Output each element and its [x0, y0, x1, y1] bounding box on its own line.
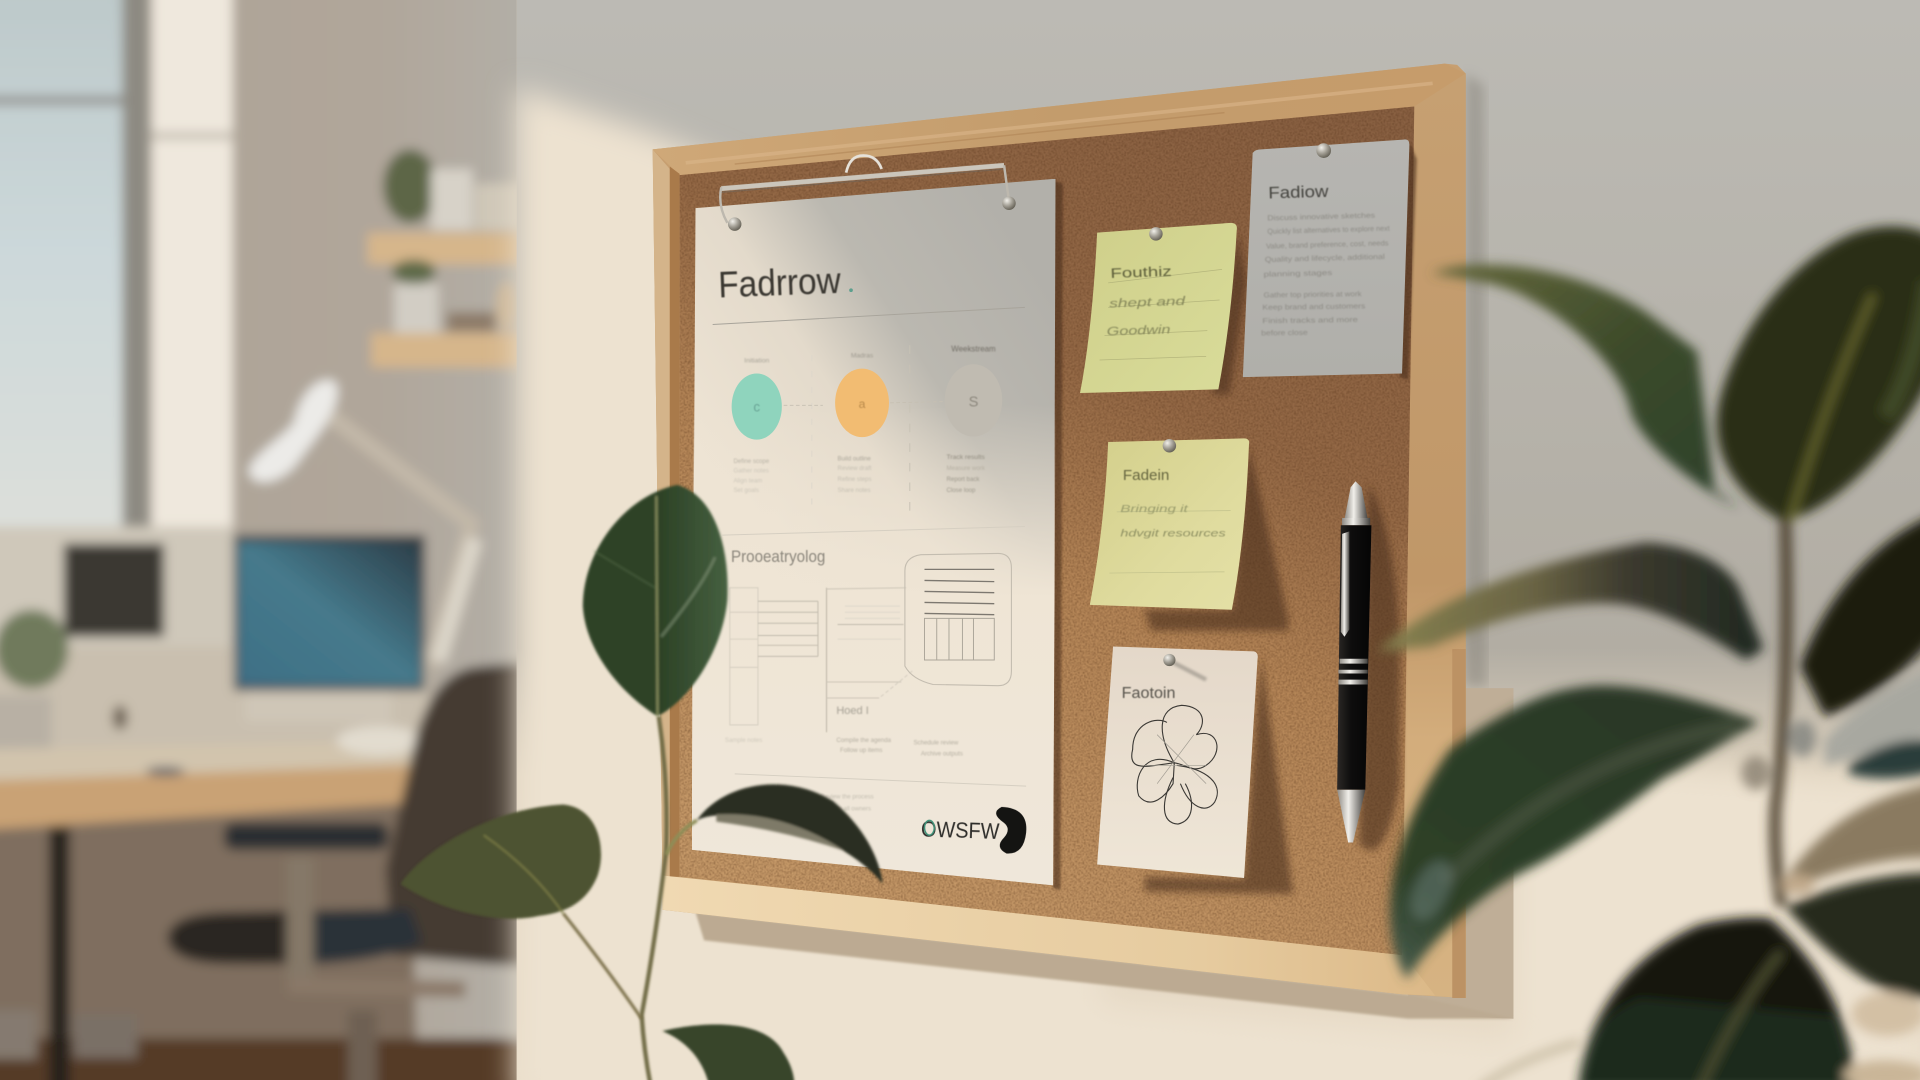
leaf: middle	[1378, 542, 1763, 660]
step circle: teal: Define scope	[733, 458, 770, 465]
note: yellow sticky top: Goodwin	[1107, 323, 1171, 339]
step circle: grey: Weekstream	[951, 344, 996, 353]
step circle: orange: Refine steps	[838, 476, 872, 483]
section heading: Prooeatryolog	[731, 547, 825, 566]
floating shelves	[367, 149, 530, 367]
card body text: Discuss innovative sketches	[1267, 211, 1375, 222]
board soft shadow	[1466, 73, 1487, 686]
step circle: teal: Gather notes	[733, 468, 769, 475]
leaf: upper right	[1717, 227, 1920, 520]
leaf: left	[400, 804, 601, 919]
step circle: grey	[945, 344, 1002, 494]
step circle: orange: a	[859, 397, 866, 411]
card body text: Quality and lifecycle, additional	[1265, 252, 1385, 264]
step circle: grey: Measure work	[947, 465, 986, 472]
shadows of pinned items	[1053, 142, 1417, 894]
desk plant	[0, 610, 127, 759]
card body text: Value, brand preference, cost, needs	[1266, 238, 1389, 251]
poster: Fadrrow: Confirm all owners	[820, 806, 871, 813]
step circle: teal	[732, 357, 782, 494]
note: yellow sticky top	[1080, 223, 1237, 393]
blurred office background	[0, 0, 551, 1080]
card body text: Gather top priorities at work	[1264, 289, 1362, 300]
step circle: grey: Track results	[947, 454, 985, 461]
leaf: pale tan	[1782, 784, 1920, 894]
step circle: grey: Report back	[947, 476, 980, 483]
step circle: teal: Align team	[733, 477, 762, 484]
poster: Fadrrow: Compile the agenda	[836, 737, 892, 744]
leaf: upper	[583, 485, 728, 716]
flower sketch	[1132, 705, 1217, 824]
poster sheet	[692, 179, 1056, 885]
poster title: Fadrrow	[718, 260, 842, 306]
pen clip	[1341, 531, 1349, 637]
note: yellow sticky middle: hdvgit resources	[1120, 528, 1226, 539]
desk top	[0, 726, 422, 830]
poster: Fadrrow: Schedule review	[913, 739, 959, 746]
wooden frame	[653, 64, 1466, 998]
step circle: teal: c	[753, 399, 760, 414]
small plant in front	[400, 485, 883, 1080]
board cast shadow	[1408, 688, 1513, 1019]
note: Fadiow grey card	[1243, 139, 1409, 377]
step circle: orange	[835, 353, 889, 494]
note heading: Fouthiz	[1110, 264, 1172, 281]
leaf: lower right	[1785, 873, 1920, 998]
poster: Fadrrow: Sample notes	[725, 737, 762, 744]
large blurred plant	[1378, 227, 1920, 1080]
poster: Fadrrow: Review the process	[820, 793, 874, 800]
accent dot	[849, 288, 853, 292]
under desk wall	[0, 803, 416, 1041]
note: white sketch card	[1097, 647, 1258, 878]
pin	[1149, 227, 1163, 241]
card body text: Keep brand and customers	[1262, 301, 1366, 312]
step circle: grey: S	[969, 395, 979, 411]
node blobs	[1741, 756, 1771, 790]
leaf: upper left	[1431, 265, 1739, 508]
poster: Fadrrow: Sign-off	[823, 831, 844, 838]
card title: Fadiow	[1268, 182, 1329, 202]
floor	[0, 1038, 551, 1080]
poster: Fadrrow: Next steps	[823, 818, 852, 825]
note heading: Fadein	[1123, 468, 1169, 484]
pale stalk	[1478, 1042, 1580, 1080]
cream blobs	[1851, 992, 1920, 1036]
pen bands	[1338, 659, 1368, 684]
wall	[517, 0, 1920, 1080]
step circle: orange: Review draft	[838, 465, 872, 472]
card body text: Finish tracks and more	[1262, 315, 1358, 325]
note lines	[1100, 269, 1222, 360]
card body text	[1261, 211, 1390, 338]
logo	[921, 807, 1026, 854]
note heading: Faotoin	[1122, 685, 1176, 702]
process wireframe	[730, 588, 912, 732]
step circle: grey: Close loop	[947, 487, 976, 494]
window	[0, 0, 233, 649]
leaf: lower	[1390, 685, 1760, 980]
pale streak	[1824, 667, 1920, 765]
sunlight patch	[517, 88, 1920, 1080]
pin	[1163, 654, 1176, 666]
card body text: Quickly list alternatives to explore next	[1267, 224, 1390, 236]
leaf: far right	[1800, 514, 1920, 716]
leaf: right	[697, 784, 883, 884]
poster: Fadrrow: Follow up items	[840, 747, 882, 754]
pin	[1163, 439, 1176, 452]
cork surface	[673, 98, 1420, 967]
pin	[1316, 143, 1331, 158]
step circle: teal: Initiation	[744, 357, 770, 364]
detail window diagram	[905, 553, 1011, 686]
desk leg	[49, 827, 70, 1080]
step circle: orange: Share notes	[838, 487, 871, 494]
poster: Fadrrow: Archive outputs	[921, 751, 963, 758]
desk clutter	[0, 647, 429, 751]
step circle: orange: Build outline	[838, 455, 871, 462]
leaf: bottom center	[1578, 917, 1856, 1080]
leaf: bottom	[662, 1024, 794, 1080]
card body text: before close	[1261, 328, 1308, 338]
cork board	[653, 64, 1466, 998]
monitors	[64, 535, 425, 722]
card body text: planning stages	[1263, 268, 1333, 279]
stems	[642, 716, 667, 1080]
poster: Fadrrow	[692, 179, 1056, 885]
note: yellow sticky middle	[1090, 438, 1249, 610]
logo: OWSFW	[921, 816, 1000, 844]
step circle: orange: Madras	[851, 353, 874, 360]
poster hanger bar	[720, 156, 1016, 231]
step circle: teal: Set goals	[733, 487, 759, 494]
pen	[1337, 481, 1371, 842]
callout label: Hoed I	[836, 705, 869, 717]
handwriting: Bringing it	[1120, 504, 1190, 515]
desk lamp	[243, 373, 486, 668]
office chair	[168, 661, 527, 1080]
handwriting: shept and	[1109, 295, 1186, 310]
stem	[1775, 520, 1787, 906]
